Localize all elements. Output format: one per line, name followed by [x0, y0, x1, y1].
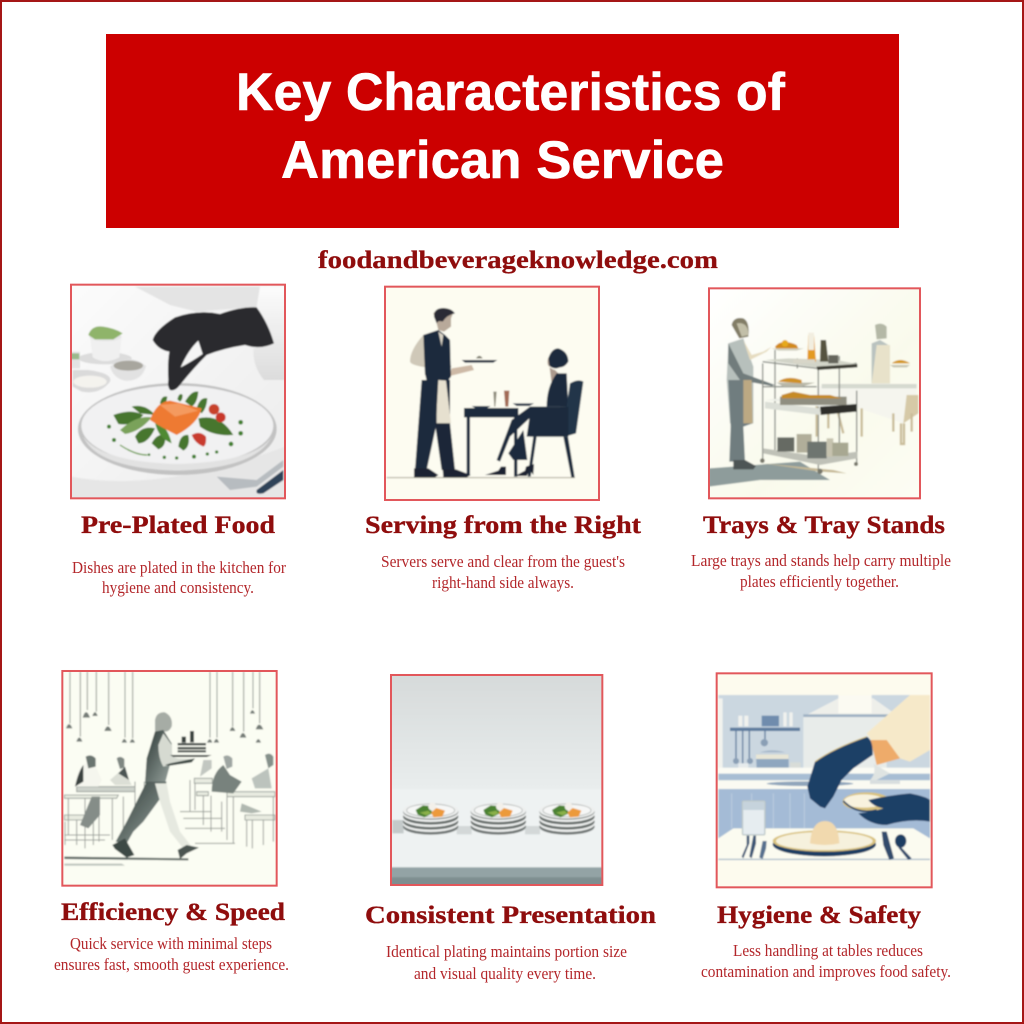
- panel: efficiency and speed: [54, 671, 289, 974]
- website url: foodandbeverageknowledge.com: [318, 247, 718, 274]
- heading: Consistent Presentation: [365, 902, 656, 929]
- title banner: Key Characteristics of: [236, 63, 785, 122]
- panel: consistent presentation: [365, 675, 656, 983]
- heading: Pre-Plated Food: [81, 512, 275, 539]
- description: Identical plating maintains portion size: [386, 942, 627, 961]
- description: right-hand side always.: [432, 573, 574, 592]
- heading: Hygiene & Safety: [717, 902, 922, 929]
- description: [386, 942, 627, 983]
- description: [381, 552, 625, 592]
- description: plates efficiently together.: [740, 572, 899, 591]
- image: gloved hands plating in a kitchen: [717, 673, 932, 887]
- description: ensures fast, smooth guest experience.: [54, 955, 289, 974]
- description: contamination and improves food safety.: [701, 962, 951, 981]
- image: waiter walking through a dining room: [62, 671, 277, 886]
- title banner: [106, 34, 899, 228]
- panel: trays and tray stands: [691, 288, 951, 591]
- panel: serving from the right: [365, 287, 642, 592]
- image border: [71, 285, 285, 498]
- image: gloved hand plating salmon: [71, 285, 285, 498]
- description: Dishes are plated in the kitchen for: [72, 558, 286, 577]
- image border: [717, 673, 932, 887]
- image border: [62, 671, 277, 886]
- heading: Efficiency & Speed: [61, 899, 285, 926]
- image: servers with tray cart and buffet table: [709, 288, 920, 498]
- description: Less handling at tables reduces: [733, 941, 923, 960]
- panel: hygiene and safety: [701, 673, 951, 981]
- heading: Serving from the Right: [365, 512, 642, 539]
- title banner: American Service: [281, 131, 724, 190]
- description: Large trays and stands help carry multiple: [691, 551, 951, 570]
- image: waiter serving seated guest: [385, 287, 599, 500]
- description: [54, 934, 289, 974]
- description: [701, 941, 951, 981]
- description: Quick service with minimal steps: [70, 934, 272, 953]
- description: Servers serve and clear from the guest's: [381, 552, 625, 571]
- description: and visual quality every time.: [414, 964, 596, 983]
- image border: [391, 675, 602, 885]
- image: three identical plate stacks on a counter: [391, 675, 602, 886]
- panel: pre-plated food: [71, 285, 286, 597]
- description: [72, 558, 286, 597]
- image border: [709, 288, 920, 498]
- image border: [385, 287, 599, 500]
- description: [691, 551, 951, 591]
- heading: Trays & Tray Stands: [703, 512, 945, 539]
- description: hygiene and consistency.: [102, 578, 254, 597]
